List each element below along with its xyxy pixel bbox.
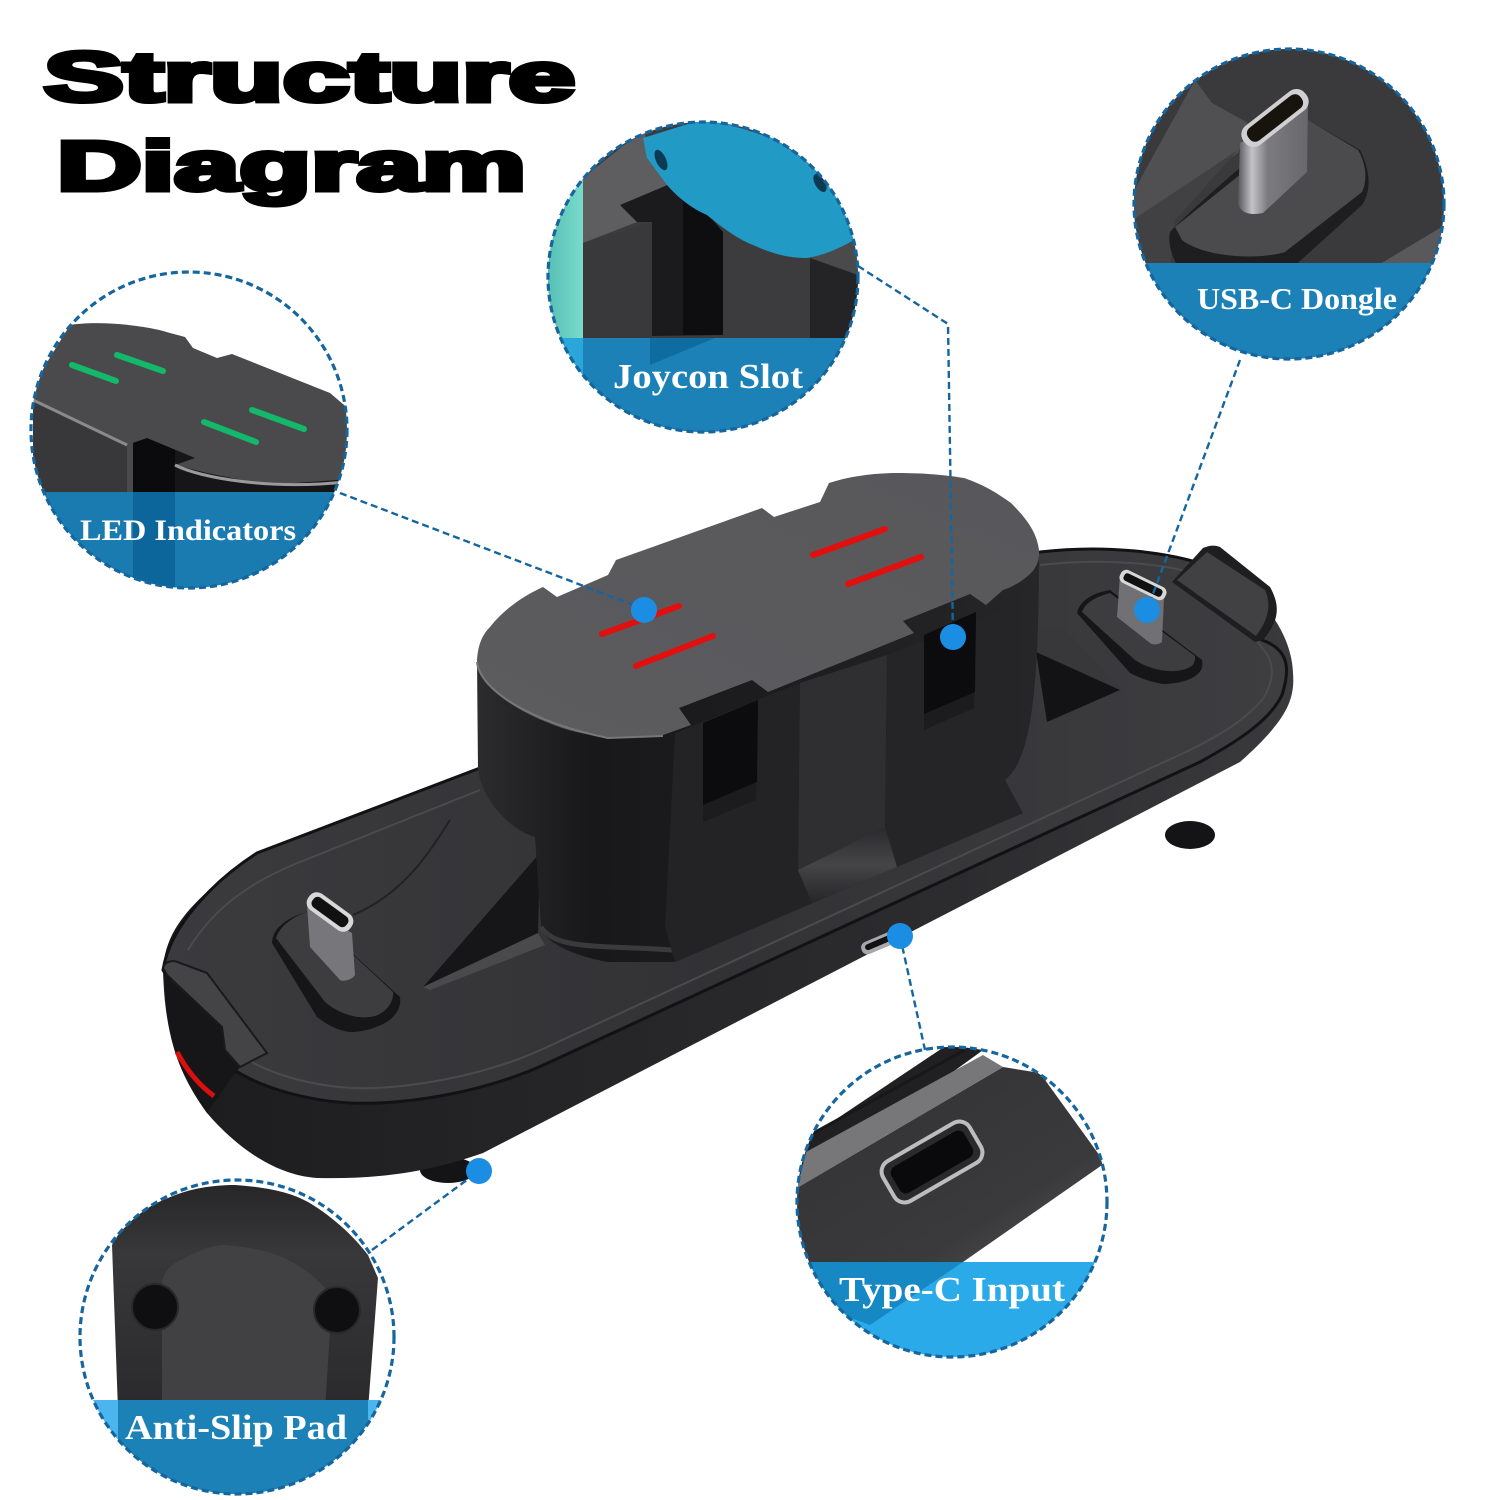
inner rim line: [188, 562, 1272, 1088]
centre tab: [798, 827, 897, 903]
label: Joycon Slot: [613, 357, 803, 396]
front red LED: [177, 1052, 214, 1096]
tower top face: [477, 473, 1039, 738]
leader line: USB-C Dongle: [1147, 360, 1240, 610]
tower centre panel: [798, 655, 897, 903]
top face LED red lights: [602, 529, 921, 666]
dock base: [163, 549, 1293, 1178]
leader line: Joycon Slot: [858, 266, 953, 637]
leader line: LED Indicators: [340, 493, 644, 609]
marker dots: [466, 597, 1160, 1184]
tower right panel: [885, 610, 1023, 867]
title: Diagram: [57, 127, 526, 205]
tower left panel: [665, 683, 812, 962]
label: Type-C Input: [839, 1270, 1065, 1309]
front Type-C port: [859, 928, 903, 956]
surface crease: [353, 820, 450, 915]
left USB-C post: [272, 889, 400, 1032]
callout: USB-C Dongle: [1125, 40, 1455, 370]
label: Anti-Slip Pad: [125, 1408, 348, 1447]
tower flange: [541, 927, 672, 950]
left cradle tab: [163, 961, 267, 1113]
title: Structure: [44, 38, 575, 116]
tower body: [477, 550, 1039, 962]
rubber feet: [420, 821, 1215, 1183]
label: LED Indicators: [80, 514, 296, 547]
dock top surface: [163, 549, 1287, 1103]
callout: Anti-Slip Pad: [75, 1175, 400, 1500]
leader line: Anti-Slip Pad: [372, 1171, 479, 1250]
callout: LED Indicators: [29, 270, 349, 590]
label: USB-C Dongle: [1197, 281, 1397, 316]
right wedge support: [1036, 628, 1122, 722]
callout: Type-C Input: [790, 1040, 1115, 1365]
charging dock product: [163, 473, 1293, 1183]
right cradle tab: [1172, 546, 1277, 642]
left wedge support: [423, 853, 545, 990]
leader line: Type-C Input: [900, 936, 925, 1050]
right USB-C post: [1077, 568, 1202, 684]
front slots: [703, 612, 976, 822]
callout: Joycon Slot: [540, 115, 870, 445]
title: [44, 38, 575, 205]
top face rim highlight: [477, 662, 663, 738]
